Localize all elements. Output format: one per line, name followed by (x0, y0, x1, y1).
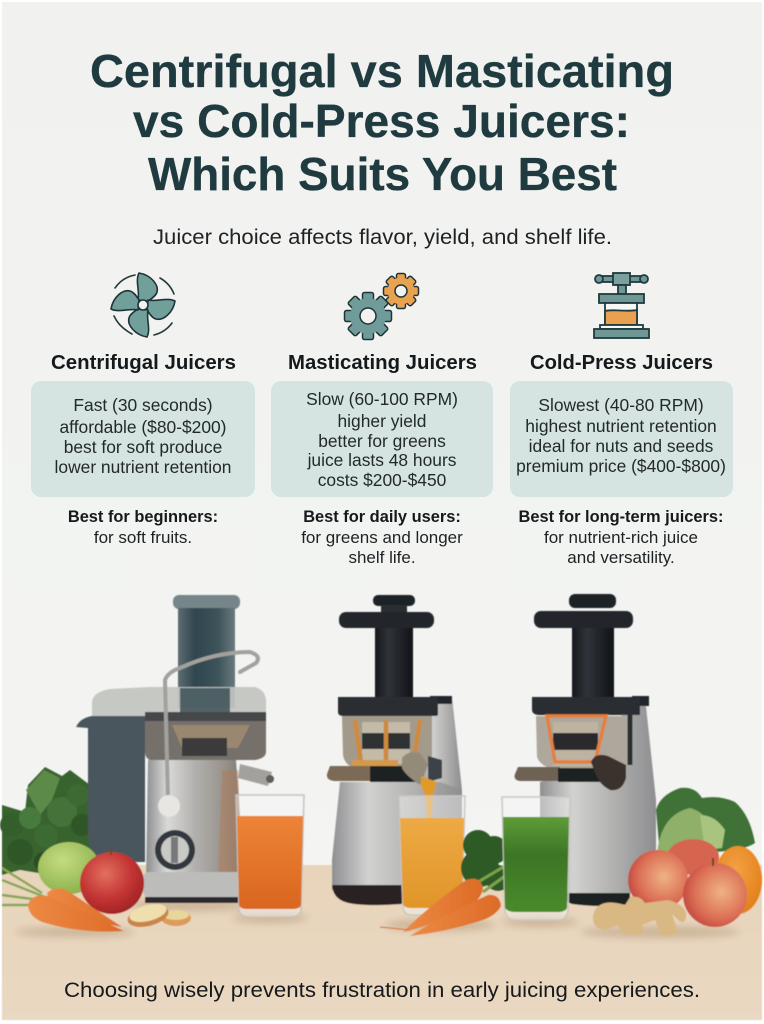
footer message: Choosing wisely prevents frustration in early juicing experiences. (64, 978, 700, 1002)
text: best for daily users: for greens and longer (301, 528, 463, 547)
pulp pitcher (76, 716, 145, 862)
carrots left (2, 868, 124, 932)
glass of carrot juice (236, 795, 304, 917)
panel: cold-press features: premium price ($400-$800) (516, 456, 726, 476)
text: best for long-term juicers: for nutrient-rich juice (544, 528, 698, 547)
orange (714, 846, 762, 914)
kale left (0, 767, 93, 875)
bowl (145, 712, 266, 760)
feed chute (178, 608, 235, 708)
plunger (569, 594, 616, 608)
tray (515, 767, 560, 781)
apple right 2 (683, 858, 747, 927)
green apple (38, 842, 100, 894)
column: centrifugal juicers (31, 273, 255, 547)
subtitle: Juicer choice affects flavor, yield, and shelf life. (153, 226, 612, 249)
column: masticating juicers (271, 274, 493, 567)
text: best for long-term juicers (519, 508, 723, 567)
text: best for beginners: for soft fruits. (94, 528, 192, 547)
title: vs Cold-Press Juicers: (133, 95, 630, 147)
plunger (373, 595, 415, 606)
panel: masticating features: better for greens (318, 431, 446, 451)
glass of orange juice (399, 796, 465, 915)
text: best for beginners: Best for beginners: (68, 508, 218, 526)
wooden table (2, 865, 762, 1020)
centrifugal juicer (76, 595, 274, 903)
column: cold-press juicers (510, 273, 733, 567)
title: Centrifugal vs Masticating (90, 45, 674, 97)
masticating juicer (327, 595, 462, 905)
kale centre (461, 830, 511, 891)
spout (591, 755, 626, 790)
panel: centrifugal features: Fast (30 seconds) (73, 395, 213, 415)
cold-press juicer (515, 594, 656, 906)
icon: centrifugal fan (111, 273, 175, 337)
panel: cold-press features: Slowest (40-80 RPM) (538, 395, 704, 415)
table shadows (15, 899, 740, 938)
ginger root (593, 897, 686, 936)
silver back column (420, 697, 462, 830)
photo scene: juicers and produce (0, 594, 762, 1020)
pusher cap (173, 595, 240, 609)
peach (667, 839, 719, 875)
ginger slices left (125, 901, 191, 931)
glass of green juice (502, 797, 570, 920)
panel: centrifugal features: best for soft produce (64, 437, 222, 457)
text: best for daily users (301, 508, 463, 567)
panel: centrifugal features: lower nutrient retention (55, 457, 231, 477)
text: best for long-term juicers: Best for long-term juicers: (519, 508, 723, 526)
text: best for daily users: Best for daily users: (303, 508, 461, 526)
heading: centrifugal: Centrifugal Juicers (51, 352, 236, 374)
icon: gears (344, 274, 418, 340)
panel: cold-press features (510, 381, 733, 497)
locking arm (165, 652, 258, 800)
text: best for long-term juicers: and versatility. (567, 548, 675, 567)
panel: cold-press features: ideal for nuts and seeds (529, 436, 714, 456)
tray (327, 766, 372, 781)
text: best for beginners (68, 508, 218, 547)
panel: masticating features: juice lasts 48 hours (307, 450, 457, 470)
juice stream (421, 776, 437, 822)
panel: masticating features: costs $200-$450 (318, 470, 446, 490)
panel: cold-press features: highest nutrient retention (525, 416, 717, 436)
heading: masticating: Masticating Juicers (288, 352, 477, 374)
base (332, 782, 462, 890)
apple right 1 (628, 850, 688, 910)
panel: masticating features (271, 381, 493, 497)
carrots centre (380, 866, 505, 936)
panel: centrifugal features: affordable ($80-$200) (60, 417, 226, 437)
title: Which Suits You Best (148, 148, 617, 200)
lid (92, 687, 266, 718)
panel: masticating features: Slow (60-100 RPM) (306, 389, 458, 409)
title (90, 45, 674, 200)
red apple (80, 848, 144, 914)
bowl (536, 716, 630, 770)
dial (155, 830, 195, 870)
panel: centrifugal features (31, 381, 255, 497)
lid (532, 697, 640, 715)
text: best for daily users: shelf life. (348, 548, 416, 567)
cabbage (656, 788, 755, 855)
icon: cold press (594, 273, 649, 338)
spout (238, 764, 272, 786)
heading: cold-press: Cold-Press Juicers (530, 352, 713, 374)
lid (338, 697, 438, 716)
foot (565, 893, 630, 906)
steel base (146, 760, 244, 882)
foot (143, 872, 240, 902)
spout (402, 752, 428, 785)
silver column and base (540, 697, 656, 893)
panel: masticating features: higher yield (338, 411, 426, 431)
bowl (342, 716, 432, 768)
